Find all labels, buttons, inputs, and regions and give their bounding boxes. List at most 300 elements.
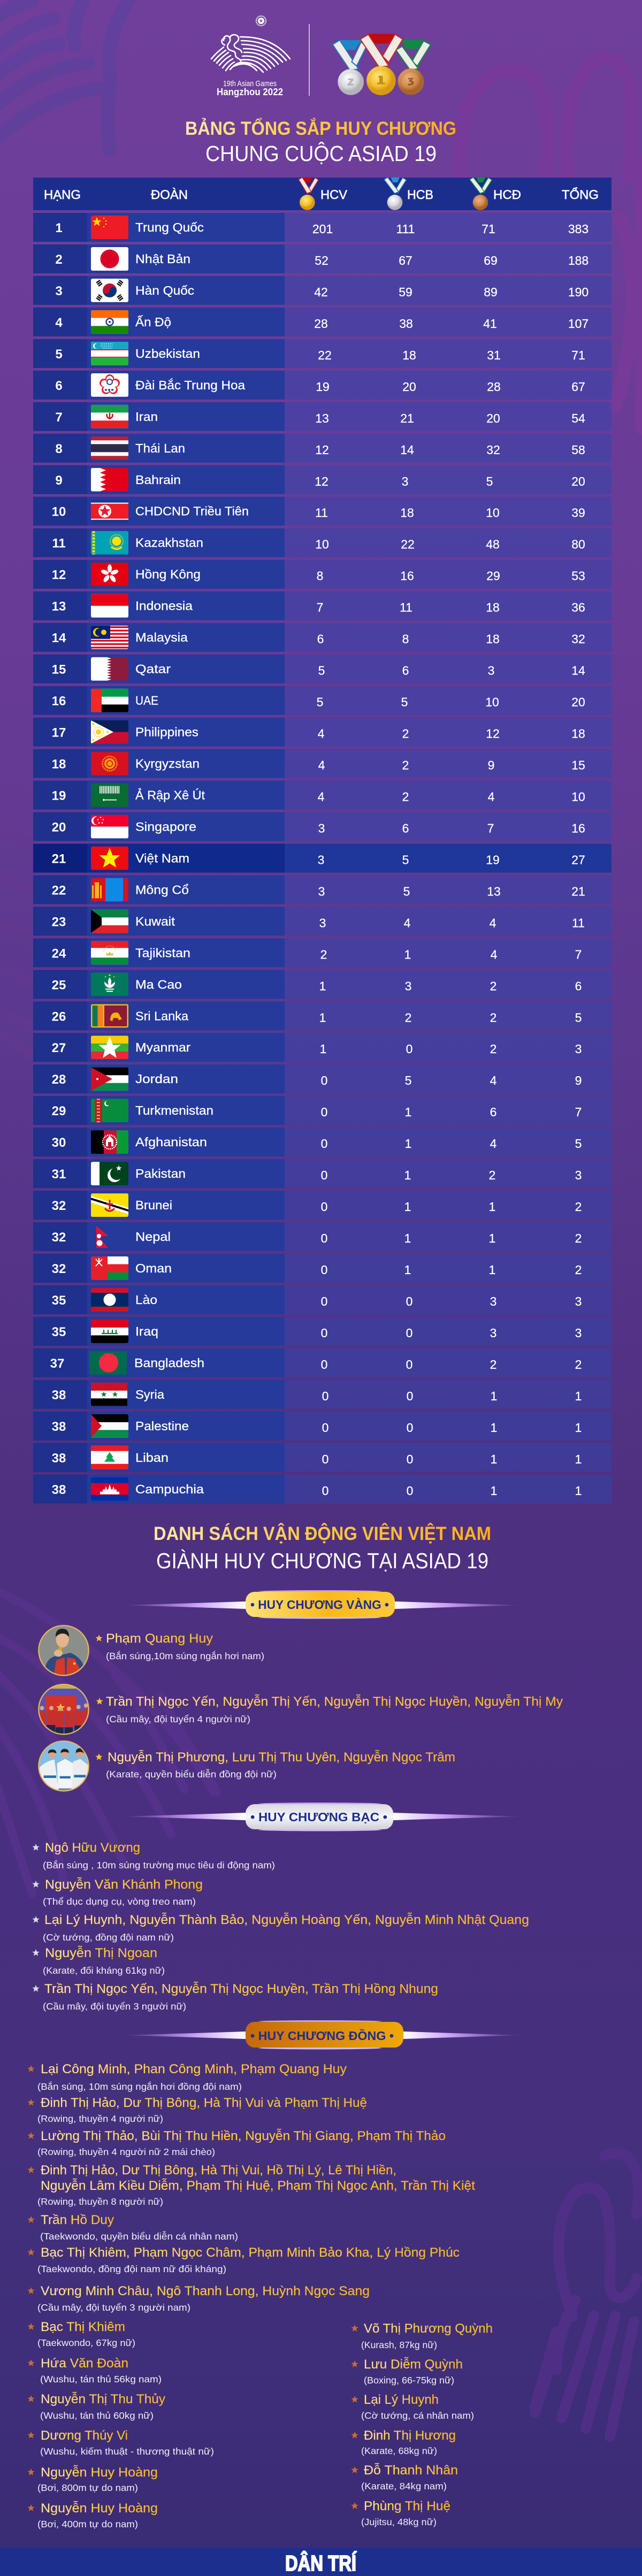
- flag: Trung Quốc: [91, 216, 128, 239]
- row 30: Afghanistan: 5: [575, 1137, 582, 1151]
- row 4: Ấn Độ: [33, 308, 612, 336]
- entry: Lại Lý Huynh: [351, 2393, 474, 2421]
- row 10: CHDCND Triều Tiên: 11: [315, 506, 328, 520]
- row 12: Hồng Kông: 29: [486, 569, 500, 583]
- entry: Bạc Thị Khiêm: [27, 2320, 135, 2348]
- row 37: Bangladesh: Bangladesh: [134, 1356, 204, 1370]
- entry: taekwondo đồng đội: [27, 2245, 460, 2274]
- text: đội cầu mây nữ: [96, 1695, 563, 1724]
- badge: Huy chương đồng: [121, 2020, 523, 2050]
- entry: Phùng Thị Huệ: (Jujitsu, 48kg nữ): [361, 2517, 437, 2527]
- entry: Lưu Diễm Quỳnh: Lưu Diễm Quỳnh: [364, 2357, 463, 2372]
- row 40: Liban: 1: [575, 1452, 582, 1466]
- row 39: Palestine: 1: [491, 1421, 497, 1435]
- row 34: Oman: 2: [575, 1263, 582, 1277]
- row 21: Việt Nam (highlighted): 19: [486, 853, 500, 867]
- text: đội cầu mây nữ: Trần Thị Ngọc Yến, Nguyễn Thị Yến, Nguyễn Thị Ngọc Huyền, Nguyễn Thị My: [106, 1695, 563, 1709]
- row 10: CHDCND Triều Tiên: 10: [486, 506, 500, 520]
- row 27: Myanmar: 2: [490, 1042, 496, 1056]
- row 6: Đài Bắc Trung Hoa: 6: [55, 379, 63, 393]
- entry: Hứa Văn Đoàn: (Wushu, tán thủ 56kg nam): [40, 2374, 162, 2385]
- row 28: Jordan: 28: [52, 1072, 66, 1087]
- row 38: Syria: 1: [491, 1389, 497, 1403]
- row 8: Thái Lan: 58: [571, 443, 585, 457]
- entry: Nguyễn Văn Khánh Phong: Nguyễn Văn Khánh Phong: [45, 1877, 203, 1892]
- row 5: Uzbekistan: 5: [55, 347, 63, 362]
- row 7: Iran: 21: [400, 411, 414, 425]
- flag: UAE: [91, 689, 128, 712]
- row 7: Iran: 13: [315, 411, 329, 425]
- table header: TỔNG: [562, 187, 599, 202]
- entry: Nguyễn Thị Ngoan: [32, 1946, 165, 1976]
- row 23: Kuwait: 4: [404, 916, 411, 930]
- row 5: Uzbekistan: Uzbekistan: [135, 347, 200, 361]
- row 35: Lào: [33, 1285, 612, 1314]
- text: Phạm Quang Huy: (Bắn súng,10m súng ngắn hơi nam): [106, 1650, 264, 1661]
- text: đội karate nữ: (Karate, quyền biểu diễn đồng đội nữ): [106, 1768, 277, 1780]
- row 29: Turkmenistan: 1: [405, 1105, 411, 1119]
- entry: Bạc Thị Khiêm: (Taekwondo, 67kg nữ): [37, 2337, 135, 2348]
- photo: Phạm Quang Huy: [32, 1624, 96, 1678]
- row 15: Qatar: [33, 655, 612, 684]
- row 34: Oman: 1: [404, 1263, 411, 1277]
- row 2: Nhật Bản: 188: [568, 254, 588, 267]
- entry: Trần Hồ Duy: [27, 2213, 238, 2242]
- row 6: Đài Bắc Trung Hoa: 28: [487, 380, 501, 394]
- row 38: Syria: Syria: [135, 1387, 164, 1401]
- row 3: Hàn Quốc: [33, 276, 612, 305]
- table header: HCB: [407, 188, 433, 202]
- row 38: Syria: 0: [407, 1389, 413, 1403]
- row 17: Philippines: 17: [52, 725, 66, 740]
- row 27: Myanmar: 0: [406, 1042, 412, 1056]
- row 31: Pakistan: 1: [404, 1168, 411, 1182]
- row 19: Ả Rập Xê Út: 19: [52, 788, 66, 803]
- entry: rowing 8 người: (Rowing, thuyền 8 người nữ): [37, 2196, 163, 2207]
- row 6: Đài Bắc Trung Hoa: 20: [402, 380, 416, 394]
- entry: rowing 8 người: [27, 2163, 475, 2207]
- row 38: Syria: [33, 1380, 612, 1409]
- subtitle: Giành huy chương: GIÀNH HUY CHƯƠNG TẠI ASIAD 19: [156, 1548, 488, 1573]
- row 15: Qatar: 15: [52, 663, 66, 677]
- row 41: Campuchia: 38: [52, 1483, 66, 1497]
- row 13: Indonesia: 11: [400, 601, 412, 615]
- badge: Huy chương đồng: • HUY CHƯƠNG ĐỒNG •: [250, 2028, 394, 2043]
- table header: ĐOÀN: [151, 188, 188, 202]
- entry: Nguyễn Thị Thu Thủy: (Wushu, tán thủ 60kg nữ): [40, 2410, 154, 2421]
- row 18: Kyrgyzstan: 18: [52, 757, 66, 771]
- row 32: Brunei: [33, 1191, 612, 1220]
- row 17: Philippines: [33, 718, 612, 747]
- background swirl: medal list left: [0, 1591, 217, 1893]
- entry: Lại Lý Huynh: Lại Lý Huynh: [364, 2393, 439, 2407]
- row 3: Hàn Quốc: 3: [55, 284, 63, 298]
- row 4: Ấn Độ: 28: [314, 317, 328, 331]
- entry: Phùng Thị Huệ: [351, 2499, 450, 2527]
- row 37: Bangladesh: 0: [321, 1358, 327, 1371]
- row 26: Sri Lanka: 2: [490, 1010, 496, 1024]
- row 22: Mông Cổ: 3: [318, 884, 325, 898]
- row 30: Afghanistan: 1: [405, 1137, 411, 1151]
- row 41: Campuchia: [33, 1475, 612, 1504]
- entry: Lại Lý Huynh: (Cờ tướng, cá nhân nam): [361, 2410, 474, 2421]
- row 17: Philippines: 4: [318, 726, 325, 740]
- flag: Đài Bắc Trung Hoa: [91, 373, 128, 397]
- row 21: Việt Nam (highlighted): 27: [571, 853, 585, 867]
- row 28: Jordan: 0: [321, 1074, 327, 1087]
- title: Bảng tổng sắp huy chương: BẢNG TỔNG SẮP HUY CHƯƠNG: [185, 118, 456, 139]
- row 2: Nhật Bản: 52: [315, 254, 328, 267]
- silver list: [32, 1841, 529, 2012]
- flag: Ma Cao: [91, 972, 128, 996]
- row 10: CHDCND Triều Tiên: CHDCND Triều Tiên: [135, 504, 249, 518]
- row 12: Hồng Kông: 8: [317, 569, 323, 583]
- flag: Liban: [91, 1446, 128, 1469]
- row 10: CHDCND Triều Tiên: 10: [52, 505, 66, 519]
- row 29: Turkmenistan: [33, 1096, 612, 1125]
- text: Phạm Quang Huy: Phạm Quang Huy: [106, 1631, 213, 1646]
- row 23: Kuwait: 23: [52, 915, 66, 929]
- table header: HẠNG: [44, 188, 81, 202]
- row 24: Tajikistan: 24: [52, 946, 66, 961]
- row 36: Iraq: 0: [406, 1326, 412, 1340]
- row 19: Ả Rập Xê Út: 4: [488, 789, 495, 803]
- row 24: Tajikistan: Tajikistan: [135, 946, 190, 960]
- row 36: Iraq: [33, 1317, 612, 1346]
- flag: Hồng Kông: [91, 563, 128, 586]
- row 10: CHDCND Triều Tiên: [33, 497, 612, 526]
- row 39: Palestine: [33, 1412, 612, 1440]
- table header: HCV: [320, 188, 347, 202]
- entry: cầu mây nam: Vương Minh Châu, Ngô Thanh Long, Huỳnh Ngọc Sang: [41, 2284, 370, 2298]
- row 15: Qatar: 5: [318, 664, 325, 678]
- row 5: Uzbekistan: [33, 339, 612, 368]
- table header: [33, 178, 612, 210]
- badge: Huy chương bạc: [121, 1803, 523, 1831]
- entry: rowing 2 mái chèo: [27, 2129, 446, 2157]
- row 32: Brunei: 32: [52, 1199, 66, 1213]
- row 7: Iran: 7: [55, 410, 63, 425]
- logo caption: Hangzhou 2022: [217, 87, 283, 97]
- flag: Syria: [91, 1383, 127, 1406]
- row 19: Ả Rập Xê Út: 2: [402, 789, 409, 803]
- entry: Nguyễn Huy Hoàng 400m: [27, 2501, 158, 2529]
- entry: rowing 4 người: [27, 2096, 367, 2124]
- row 35: Lào: Lào: [135, 1293, 157, 1307]
- entry: cờ tướng đồng đội: [32, 1913, 529, 1943]
- entry: Ngô Hữu Vương: [32, 1841, 275, 1870]
- row 14: Malaysia: [33, 623, 612, 652]
- title: Danh sách vận động viên: DANH SÁCH VẬN ĐỘNG VIÊN VIỆT NAM: [154, 1523, 491, 1544]
- row 6: Đài Bắc Trung Hoa: [33, 371, 612, 400]
- row 2: Nhật Bản: 69: [484, 254, 498, 267]
- flag: Qatar: [91, 657, 128, 681]
- row 26: Sri Lanka: 5: [575, 1010, 582, 1024]
- row 28: Jordan: [33, 1064, 612, 1093]
- text: đội cầu mây nữ: (Cầu mây, đội tuyển 4 người nữ): [106, 1714, 250, 1724]
- entry: Đinh Thị Hương: Đinh Thị Hương: [364, 2428, 456, 2443]
- row 29: Turkmenistan: 7: [575, 1105, 582, 1119]
- entry: cầu mây 3 người: Trần Thị Ngọc Yến, Nguyễn Thị Ngọc Huyền, Trần Thị Hồng Nhung: [44, 1982, 438, 1996]
- row 8: Thái Lan: [33, 434, 612, 463]
- row 39: Palestine: Palestine: [135, 1419, 189, 1433]
- row 18: Kyrgyzstan: [33, 749, 612, 778]
- entry: Bạc Thị Khiêm: Bạc Thị Khiêm: [41, 2320, 125, 2334]
- row 26: Sri Lanka: 2: [405, 1010, 411, 1024]
- row 5: Uzbekistan: 18: [402, 348, 416, 362]
- row 11: Kazakhstan: Kazakhstan: [135, 536, 203, 550]
- footer: Dân Trí: DÂN TRÍ: [285, 2551, 357, 2575]
- row 10: CHDCND Triều Tiên: 39: [571, 506, 585, 520]
- row 16: UAE: 5: [401, 695, 408, 709]
- row 14: Malaysia: Malaysia: [135, 631, 188, 645]
- row 18: Kyrgyzstan: 2: [402, 758, 409, 772]
- bronze list: left column: [27, 2062, 475, 2529]
- entry: Nguyễn Văn Khánh Phong: (Thể dục dụng cụ, vòng treo nam): [43, 1896, 196, 1907]
- entry: Dương Thúy Vi: (Wushu, kiếm thuật - thương thuật nữ): [40, 2446, 214, 2457]
- row 24: Tajikistan: 7: [575, 947, 582, 961]
- row 13: Indonesia: [33, 592, 612, 620]
- row 30: Afghanistan: 30: [52, 1136, 66, 1150]
- row 1: Trung Quốc: 383: [568, 222, 588, 236]
- row 37: Bangladesh: 2: [490, 1358, 496, 1371]
- row 23: Kuwait: [33, 907, 612, 936]
- row 12: Hồng Kông: 16: [400, 569, 414, 583]
- entry: Trần Hồ Duy: Trần Hồ Duy: [41, 2213, 114, 2227]
- row 13: Indonesia: 13: [52, 600, 66, 614]
- row 28: Jordan: Jordan: [135, 1072, 178, 1086]
- row 14: Malaysia: 14: [52, 631, 66, 646]
- row 7: Iran: 20: [486, 411, 500, 425]
- entry: cầu mây 3 người: [32, 1982, 438, 2012]
- row 26: Sri Lanka: [33, 1001, 612, 1030]
- photo: đội cầu mây nữ: [32, 1683, 96, 1737]
- flag: Kuwait: [91, 909, 128, 933]
- row 37: Bangladesh: 2: [575, 1358, 582, 1371]
- background swirl: top left: [0, 0, 128, 150]
- flag: Indonesia: [91, 594, 128, 618]
- row 16: UAE: UAE: [135, 694, 158, 708]
- row 15: Qatar: 6: [402, 664, 409, 678]
- flag: Campuchia: [91, 1477, 128, 1501]
- flag: Afghanistan: [91, 1130, 128, 1154]
- row 5: Uzbekistan: 31: [487, 348, 501, 362]
- background swirl: bottom right: [535, 2153, 638, 2436]
- row 36: Iraq: Iraq: [135, 1324, 158, 1338]
- row 8: Thái Lan: Thái Lan: [135, 441, 185, 455]
- entry: bắn súng đồng đội: (Bắn súng, 10m súng ngắn hơi đồng đội nam): [37, 2081, 242, 2092]
- entry: Nguyễn Huy Hoàng 800m: [27, 2465, 158, 2493]
- entry: bắn súng đồng đội: Lại Công Minh, Phan Công Minh, Phạm Quang Huy: [41, 2062, 347, 2076]
- row 9: Bahrain: 9: [55, 473, 63, 488]
- row 20: Singapore: 16: [571, 821, 585, 835]
- row 25: Ma Cao: 3: [405, 979, 411, 993]
- row 15: Qatar: Qatar: [135, 662, 171, 676]
- row 13: Indonesia: Indonesia: [135, 599, 193, 613]
- row 8: Thái Lan: 32: [486, 443, 500, 457]
- entry: Đỗ Thanh Nhân: [351, 2463, 458, 2491]
- flag: Kyrgyzstan: [91, 752, 128, 776]
- row 41: Campuchia: Campuchia: [135, 1482, 204, 1496]
- row 25: Ma Cao: 1: [319, 979, 326, 993]
- text: Phạm Quang Huy: [95, 1631, 264, 1661]
- row 7: Iran: [33, 402, 612, 431]
- row 20: Singapore: 7: [487, 821, 494, 835]
- entry: Võ Thị Phương Quỳnh: Võ Thị Phương Quỳnh: [364, 2321, 493, 2336]
- row 17: Philippines: Philippines: [135, 725, 198, 739]
- entry: Lưu Diễm Quỳnh: [351, 2357, 463, 2386]
- row 28: Jordan: 9: [575, 1074, 582, 1087]
- row 9: Bahrain: 3: [402, 474, 408, 488]
- entry: Lưu Diễm Quỳnh: (Boxing, 66-75kg nữ): [364, 2375, 454, 2386]
- row 14: Malaysia: 32: [571, 632, 585, 646]
- row 11: Kazakhstan: 80: [571, 538, 585, 551]
- row 24: Tajikistan: [33, 938, 612, 967]
- row 13: Indonesia: 7: [317, 601, 323, 615]
- row 12: Hồng Kông: 53: [571, 569, 585, 583]
- entry: Đinh Thị Hương: [351, 2428, 456, 2456]
- row 24: Tajikistan: 4: [491, 947, 498, 961]
- row 36: Iraq: 0: [321, 1326, 327, 1340]
- flag: Nhật Bản: [91, 247, 128, 271]
- row 21: Việt Nam (highlighted): 21: [52, 852, 66, 866]
- row 26: Sri Lanka: 26: [52, 1009, 66, 1024]
- flag: Palestine: [91, 1414, 128, 1438]
- row 33: Nepal: [33, 1222, 612, 1251]
- row 14: Malaysia: 18: [486, 632, 500, 646]
- row 11: Kazakhstan: [33, 528, 612, 557]
- entry: bắn súng đồng đội: [27, 2062, 347, 2092]
- row 22: Mông Cổ: 21: [571, 884, 585, 898]
- background swirl: top right: [459, 58, 642, 428]
- row 23: Kuwait: 11: [572, 916, 585, 930]
- entry: Nguyễn Văn Khánh Phong: [32, 1877, 203, 1907]
- row 21: Việt Nam (highlighted): 5: [402, 853, 409, 867]
- row 32: Brunei: 2: [575, 1200, 582, 1214]
- row 9: Bahrain: [33, 465, 612, 494]
- icon: small games emblem: [256, 16, 266, 26]
- entry: Võ Thị Phương Quỳnh: [351, 2321, 493, 2350]
- badge: Huy chương vàng: • HUY CHƯƠNG VÀNG •: [250, 1597, 389, 1612]
- row 31: Pakistan: 2: [489, 1168, 495, 1182]
- row 16: UAE: [33, 686, 612, 715]
- entry: rowing 8 người: Đinh Thị Hảo, Dư Thị Bông, Hà Thị Vui, Hồ Thị Lý, Lê Thị Hiền,: [41, 2163, 396, 2178]
- flag: Jordan: [91, 1067, 128, 1091]
- entry: rowing 2 mái chèo: (Rowing, thuyền 4 người nữ 2 mái chèo): [37, 2146, 215, 2157]
- row 41: Campuchia: 0: [322, 1484, 328, 1498]
- entry: Đinh Thị Hương: (Karate, 68kg nữ): [361, 2445, 437, 2456]
- entry: Nguyễn Huy Hoàng 800m: Nguyễn Huy Hoàng: [41, 2465, 158, 2480]
- text: đội karate nữ: [95, 1750, 455, 1780]
- row 1: Trung Quốc: 111: [396, 222, 415, 236]
- row 2: Nhật Bản: 2: [55, 252, 63, 267]
- row 25: Ma Cao: Ma Cao: [135, 977, 182, 991]
- flag: Iraq: [91, 1320, 128, 1343]
- row 19: Ả Rập Xê Út: [33, 781, 612, 810]
- row 22: Mông Cổ: [33, 875, 612, 904]
- bronze list: right column: [351, 2321, 493, 2527]
- row 12: Hồng Kông: [33, 560, 612, 589]
- row 1: Trung Quốc: 1: [55, 221, 63, 235]
- row 1: Trung Quốc: 71: [482, 222, 495, 236]
- row 28: Jordan: 4: [490, 1074, 497, 1087]
- entry: Dương Thúy Vi: Dương Thúy Vi: [41, 2428, 128, 2443]
- flag: Thái Lan: [91, 436, 128, 460]
- entry: Hứa Văn Đoàn: Hứa Văn Đoàn: [41, 2356, 128, 2371]
- row 31: Pakistan: Pakistan: [135, 1167, 186, 1180]
- row 27: Myanmar: Myanmar: [135, 1040, 190, 1054]
- row 1: Trung Quốc: [33, 213, 612, 242]
- flag: Mông Cổ: [91, 878, 128, 901]
- row 25: Ma Cao: [33, 970, 612, 999]
- row 9: Bahrain: Bahrain: [135, 473, 181, 487]
- row 25: Ma Cao: 6: [575, 979, 582, 993]
- row 27: Myanmar: 3: [575, 1042, 582, 1056]
- row 19: Ả Rập Xê Út: Ả Rập Xê Út: [135, 787, 205, 802]
- flag: Việt Nam: [91, 846, 128, 870]
- row 34: Oman: [33, 1254, 612, 1283]
- row 34: Oman: 32: [52, 1262, 66, 1276]
- row 29: Turkmenistan: 0: [321, 1105, 327, 1119]
- row 4: Ấn Độ: 107: [568, 317, 588, 331]
- flag: Oman: [91, 1256, 128, 1280]
- entry: rowing 2 mái chèo: Lường Thị Thảo, Bùi Thị Thu Hiền, Nguyễn Thị Giang, Phạm Thị Thảo: [41, 2129, 446, 2143]
- row 15: Qatar: 3: [488, 664, 494, 678]
- row 38: Syria: 1: [575, 1389, 582, 1403]
- entry: Đỗ Thanh Nhân: (Karate, 84kg nam): [361, 2481, 447, 2491]
- row 7: Iran: 54: [571, 411, 585, 425]
- entry: Nguyễn Huy Hoàng 400m: (Bơi, 400m tự do nam): [37, 2519, 138, 2529]
- row 24: Tajikistan: 2: [320, 947, 327, 961]
- row 17: Philippines: 12: [486, 726, 500, 740]
- row 5: Uzbekistan: 71: [571, 348, 585, 362]
- row 26: Sri Lanka: Sri Lanka: [135, 1009, 188, 1023]
- row 33: Nepal: 2: [575, 1231, 582, 1245]
- flag: Ả Rập Xê Út: [91, 783, 128, 807]
- row 3: Hàn Quốc: 89: [484, 285, 498, 299]
- row 22: Mông Cổ: 13: [487, 884, 501, 898]
- entry: cầu mây 3 người: (Cầu mây, đội tuyển 3 người nữ): [43, 2001, 186, 2012]
- row 10: CHDCND Triều Tiên: 18: [400, 506, 414, 520]
- flag: Lào: [91, 1288, 128, 1312]
- row 18: Kyrgyzstan: 9: [488, 758, 494, 772]
- row 11: Kazakhstan: 48: [486, 538, 500, 551]
- entry: cầu mây nam: (Cầu mây, đội tuyển 3 người nam): [37, 2302, 190, 2313]
- row 19: Ả Rập Xê Út: 10: [571, 789, 585, 803]
- row 38: Syria: 38: [52, 1388, 66, 1402]
- row 39: Palestine: 1: [575, 1421, 582, 1435]
- row 22: Mông Cổ: Mông Cổ: [135, 883, 189, 896]
- entry: Hứa Văn Đoàn: [27, 2356, 162, 2385]
- row 21: Việt Nam (highlighted): Việt Nam: [135, 851, 189, 865]
- row 19: Ả Rập Xê Út: 4: [318, 789, 325, 803]
- row 20: Singapore: 3: [318, 821, 325, 835]
- entry: taekwondo đồng đội: Bạc Thị Khiêm, Phạm Ngọc Châm, Phạm Minh Bảo Kha, Lý Hồng Phúc: [41, 2245, 460, 2260]
- row 31: Pakistan: 0: [321, 1168, 327, 1182]
- row 13: Indonesia: 36: [571, 601, 585, 615]
- flag: Bangladesh: [89, 1351, 127, 1375]
- flag: Malaysia: [91, 626, 128, 649]
- row 7: Iran: Iran: [135, 410, 158, 424]
- row 33: Nepal: 1: [489, 1231, 495, 1245]
- row 34: Oman: Oman: [135, 1261, 172, 1275]
- row 20: Singapore: 20: [52, 820, 66, 834]
- text: đội karate nữ: Nguyễn Thị Phương, Lưu Thị Thu Uyên, Nguyễn Ngọc Trâm: [108, 1750, 455, 1765]
- row 33: Nepal: 1: [404, 1231, 411, 1245]
- row 31: Pakistan: 31: [52, 1167, 66, 1182]
- row 39: Palestine: 38: [52, 1420, 66, 1434]
- row 23: Kuwait: 4: [490, 916, 496, 930]
